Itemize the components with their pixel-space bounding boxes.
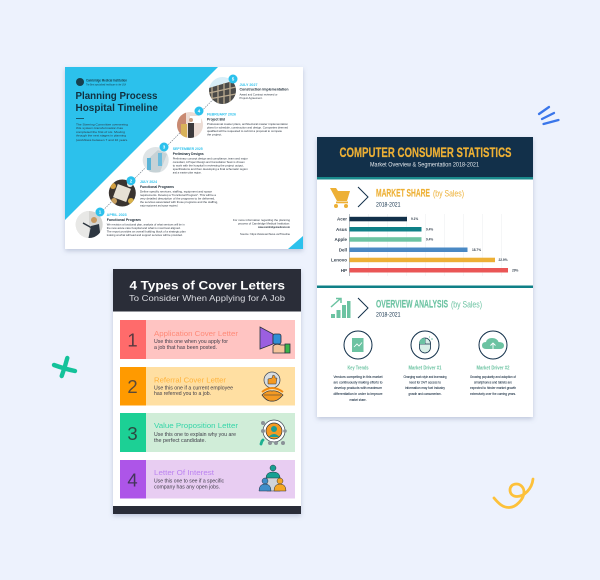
decoration: blue dashes — [539, 107, 558, 124]
infographic collage canvas — [52, 67, 560, 518]
milestone 2 text: the services associated with those programs and the staffing, — [140, 200, 218, 204]
column: market driver 2: extensively over the coming years. — [470, 391, 516, 396]
row 1: application letter: a job that has been posted. — [154, 345, 217, 351]
milestone 3 text: SEPTEMBER 2025 — [173, 147, 203, 151]
milestone 4 text: Project Bid — [207, 118, 226, 122]
milestone 3 text — [173, 147, 248, 174]
intro paragraph: completed the first of six. Moving — [76, 130, 125, 134]
milestone 1 text: looking at what will lead and support services will be provided. — [107, 233, 183, 237]
blue corner accent — [288, 236, 303, 249]
column: market driver 1: growth and consumerism. — [408, 391, 442, 396]
statistics header — [317, 137, 533, 180]
icon: growth bars — [331, 298, 350, 318]
milestone 5 text: Project Agreement. — [240, 96, 263, 100]
column: market driver 1: need for 24/7 access to — [409, 380, 442, 384]
photo: meeting table — [108, 179, 136, 207]
badge 5 — [228, 74, 238, 84]
milestone 3 text: specifications and then developing a final schematic region — [173, 167, 248, 171]
milestone 3 text: consultant, A Project Design and Consultation Team is chosen — [173, 160, 245, 164]
bar chart: market share: 9.4% — [426, 227, 433, 231]
milestone 1 text: The report provides an overall building block of a strategic plan — [107, 230, 186, 234]
intro paragraph — [76, 122, 128, 142]
icon: cloud upload — [479, 331, 507, 359]
milestone 4 text: plans for schedule, construction and design. Companies deemed — [207, 126, 288, 130]
icon: chevron — [358, 298, 368, 318]
milestone 5 text — [240, 83, 289, 100]
milestone 5 text: Construction Implementation — [240, 88, 289, 92]
row 4: letter of interest — [120, 460, 295, 498]
row 1: application letter: Application Cover Letter — [154, 331, 239, 338]
market share heading — [376, 188, 464, 208]
row 1: application letter: Use this one when you apply for — [154, 339, 228, 345]
intro paragraph: The Steering Committee overseeing — [76, 122, 128, 126]
milestone 2 text: very detailed description of the programs to be delivered, — [140, 196, 215, 200]
column: key trends: differentiation in order to improve — [334, 391, 383, 396]
further information note: For more information regarding the planning — [233, 218, 290, 222]
decoration: yellow squiggle — [494, 479, 533, 508]
bar chart: market share: 22.9% — [498, 258, 508, 262]
cover letters header: To Consider When Applying for A Job — [129, 293, 285, 303]
timeline title: Planning Process — [76, 91, 158, 102]
photo: blueprint model — [142, 147, 169, 174]
icon: key trends — [344, 331, 372, 359]
timeline title: Hospital Timeline — [76, 103, 158, 114]
milestone 1 text: Functional Program — [107, 218, 141, 222]
milestone 4 text: Professional master plans, architectural master implementation — [207, 122, 288, 126]
column: market driver 1 — [404, 366, 446, 396]
badge 4 — [194, 106, 204, 116]
bar chart: market share: Apple — [334, 237, 347, 242]
milestone 3 text: to work with the hospital in reviewing the project output, — [173, 164, 244, 168]
icon: shopping cart — [330, 188, 350, 208]
milestone 1 text: the new acute care hospital and what is most best aligned. — [107, 226, 181, 230]
milestone 3 text: Preliminary Designs — [173, 152, 204, 156]
icon: mouse — [411, 331, 439, 359]
panel: computer consumer statistics — [317, 137, 533, 417]
bar chart: market share: HP — [341, 268, 347, 273]
badge 1: 1 — [99, 210, 102, 215]
column: market driver 2: Market Driver #2 — [476, 366, 510, 372]
badge 3 — [160, 142, 168, 152]
milestone 1 text: We envision a functional plan, analysis of what services will be in — [107, 222, 185, 226]
overview heading: (by Sales) — [451, 300, 482, 311]
market share heading: (by Sales) — [433, 189, 464, 200]
milestone 1 text — [107, 213, 186, 237]
market share heading: 2018-2021 — [376, 202, 401, 208]
overview heading: OVERVIEW ANALYSIS — [376, 299, 448, 311]
milestone 2 text — [140, 180, 218, 208]
further information note — [233, 218, 290, 236]
column: market driver 2: expected to hinder market growth — [470, 385, 516, 390]
photo: workers — [177, 112, 203, 138]
panel: cover letters — [113, 269, 301, 514]
overview heading — [376, 299, 482, 319]
row 1: application letter — [120, 320, 295, 359]
milestone 5 text: Award and Contract reviewed or — [240, 92, 278, 96]
milestone 5 text: JULY 2027 — [240, 83, 258, 87]
cover letters header: 4 Types of Cover Letters — [130, 278, 285, 292]
photo: presenter — [75, 211, 103, 240]
bar chart: market share: Dell — [339, 247, 347, 252]
milestone 2 text: Functional Programs — [140, 185, 174, 189]
milestone 4 text: qualified will be requested to submit a proposal to compete — [207, 129, 282, 133]
row 2: referral letter: has referred you to a job. — [154, 391, 211, 397]
bar chart: market share: Asus — [336, 227, 347, 232]
row 2: referral letter: Use this one if a current employee — [154, 386, 233, 392]
column: key trends: Vendors competing in this market — [334, 374, 383, 379]
row 2: referral letter: 2 — [127, 376, 138, 397]
bar chart: market share: Lenovo — [331, 258, 347, 263]
row 2: referral letter: Referral Cover Letter — [154, 378, 227, 384]
market share heading: MARKET SHARE — [376, 188, 430, 200]
row 1: application letter: 1 — [127, 330, 138, 351]
icon: team — [259, 465, 286, 491]
further information note: process of Cambridge Medical Institution: — [238, 222, 290, 226]
badge 4: 4 — [198, 109, 201, 114]
badge 2: 2 — [130, 178, 133, 183]
row 4: letter of interest: company has any open jobs. — [154, 484, 220, 490]
badge 5: 5 — [232, 77, 235, 82]
panel: hospital timeline — [65, 67, 303, 249]
timeline connector — [89, 90, 222, 224]
bar chart: market share — [331, 214, 519, 276]
row 2: referral letter — [120, 367, 295, 406]
logo: Cambridge Medical Institution — [86, 78, 127, 82]
milestone 4 text: the project. — [207, 133, 222, 137]
bar chart: market share: 9.4% — [426, 238, 433, 242]
milestone 2 text: Define specific services, staffing, equipment and space — [140, 190, 212, 194]
section divider — [317, 286, 533, 288]
column: market driver 2: smartphones and tablets are — [474, 380, 513, 384]
icon: thumbs up and lips — [262, 372, 283, 401]
icon: candidate search — [261, 420, 287, 445]
column: market driver 1: Changing work style and increasing — [404, 374, 446, 379]
milestone 2 text: major equipment and space required. — [140, 204, 178, 208]
milestone 2 text: JULY 2024 — [140, 180, 157, 184]
row 3: value proposition letter: Value Proposition Letter — [154, 423, 239, 430]
milestone 4 text — [207, 112, 288, 137]
milestone 4 text: FEBRUARY 2026 — [207, 112, 236, 116]
logo: The Best specialized healthcare in the USA — [86, 82, 126, 86]
intro paragraph: through the next stages in planning — [76, 134, 126, 138]
bar chart: market share: 18.7% — [472, 248, 481, 252]
further information note: Source: https://www.archives.us/Timeline — [240, 232, 290, 236]
row 3: value proposition letter: 3 — [127, 423, 138, 444]
milestone 1 text: APRIL 2023 — [107, 213, 127, 217]
milestone 3 text: Preliminary concept design and compliance, team and major — [173, 156, 248, 160]
column: key trends: Key Trends — [348, 366, 369, 372]
photo: building — [209, 77, 236, 104]
icon: chevron — [358, 187, 368, 207]
column: market driver 1: information may fuel industry — [405, 385, 445, 390]
blue diagonal background — [65, 67, 218, 220]
decoration: green cross — [54, 358, 75, 376]
milestone 2 text: requirements. Develop a "Functional Program". This will be a — [140, 193, 216, 197]
badge 2 — [126, 176, 136, 185]
overview heading: 2018-2021 — [376, 312, 401, 319]
column: key trends — [334, 366, 383, 402]
intro paragraph: this system transformation has — [76, 126, 124, 130]
column: key trends: are continuously making efforts to — [334, 380, 383, 384]
row 3: value proposition letter: Use this one to explain why you are — [154, 432, 236, 438]
bar chart: market share: 9.1% — [411, 217, 418, 221]
row 4: letter of interest: Use this one to see if a specific — [154, 478, 224, 484]
timeline title — [76, 91, 158, 119]
footer bar — [113, 506, 301, 514]
column: market driver 2: Growing popularity and adoption of — [470, 374, 517, 379]
icon: megaphone — [260, 327, 290, 353]
statistics header: Market Overview & Segmentation 2018-2021 — [370, 162, 479, 169]
column: market driver 1: Market Driver #1 — [408, 366, 442, 372]
column: market driver 2 — [470, 366, 517, 396]
row 4: letter of interest: Letter Of Interest — [154, 470, 214, 477]
statistics header: COMPUTER CONSUMER STATISTICS — [340, 145, 512, 160]
cover letters header — [113, 269, 301, 312]
further information note: www.cambridgemedical.com — [257, 225, 290, 229]
logo — [76, 78, 127, 86]
row 3: value proposition letter — [120, 413, 295, 452]
intro paragraph: (workflows between 7 and 10 years. — [76, 138, 128, 142]
column: key trends: market share. — [350, 397, 366, 402]
badge 1 — [96, 208, 104, 216]
column: key trends: develop products with maximum — [334, 385, 383, 390]
bar chart: market share: 29% — [512, 268, 519, 272]
badge 3: 3 — [163, 145, 166, 150]
row 4: letter of interest: 4 — [127, 470, 138, 490]
row 3: value proposition letter: the perfect candidate. — [154, 438, 206, 444]
bar chart: market share: Acer — [337, 217, 347, 222]
milestone 3 text: and a master plan region. — [173, 170, 202, 174]
